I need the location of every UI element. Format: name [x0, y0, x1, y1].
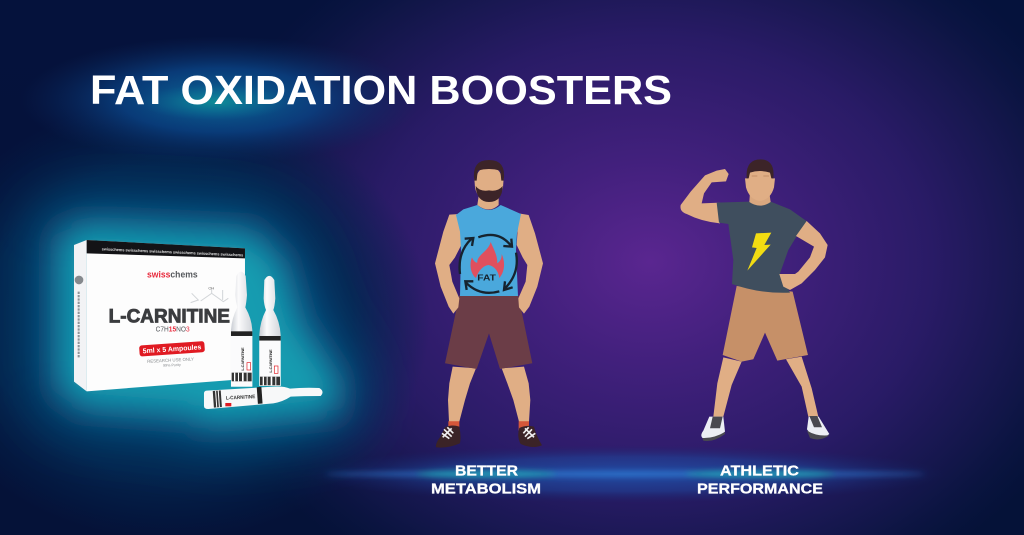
- eyebrows: [752, 175, 769, 177]
- product name: L-CARNITINE: [109, 306, 230, 327]
- ampoule lying down: L-CARNITINE: [226, 394, 256, 402]
- figure: man with fat-burning icon: [435, 160, 543, 448]
- side seal: [75, 276, 83, 358]
- shorts: [445, 295, 532, 369]
- box black top band: [87, 240, 245, 258]
- label: athletic performance: ATHLETIC: [720, 462, 799, 480]
- research note: RESEARCH USE ONLY: [147, 356, 194, 364]
- ampoule lying down: [204, 387, 323, 409]
- left shoe: [701, 417, 725, 439]
- label: better metabolism: METABOLISM: [431, 480, 541, 498]
- neck: [477, 192, 499, 209]
- shoes: [436, 425, 542, 448]
- hair: [747, 159, 774, 178]
- head: [745, 167, 775, 201]
- label: athletic performance: PERFORMANCE: [697, 480, 823, 498]
- label: better metabolism: BETTER: [455, 462, 518, 480]
- legs: [448, 367, 530, 422]
- molecule labels: OH: [208, 285, 214, 290]
- product: L-carnitine box and ampoules: [74, 240, 323, 409]
- formula: C7H15NO3: [156, 327, 190, 334]
- neck: [749, 193, 771, 206]
- legs: [713, 357, 818, 417]
- ampoule back: L-CARNITINE: [268, 349, 273, 373]
- hair: [474, 160, 504, 181]
- grey t-shirt: [717, 202, 807, 293]
- flame icon: [471, 242, 504, 278]
- flexing arm: [680, 169, 729, 223]
- beard: [476, 186, 503, 202]
- brand logo: swisschems: [147, 270, 198, 280]
- arms: [435, 213, 543, 314]
- head: [474, 167, 504, 201]
- figure: man flexing with lightning shirt: [680, 159, 829, 441]
- label: athletic performance: [697, 462, 823, 498]
- hip arm: [779, 221, 828, 290]
- research note: 99% Purity: [163, 363, 181, 368]
- label: better metabolism: [431, 462, 541, 498]
- FAT label: FAT: [477, 272, 496, 282]
- ampoule back: [259, 276, 281, 386]
- shoe laces: [442, 427, 535, 439]
- ampoule front: [231, 272, 252, 387]
- box side panel: [74, 240, 87, 391]
- research note: [147, 356, 194, 368]
- red dose badge: [139, 341, 205, 357]
- blue tank top: [456, 205, 521, 296]
- ampoule front: L-CARNITINE: [240, 347, 245, 371]
- right shoe: [807, 417, 829, 437]
- shorts: [723, 286, 808, 362]
- lightning bolt: [747, 233, 771, 271]
- box front panel: [87, 240, 245, 391]
- box black top band: swisschems swisschems swisschems swisschems swisschems swisschems: [102, 246, 244, 258]
- red dose badge: 5ml x 5 Ampoules: [143, 344, 202, 355]
- socks: [448, 421, 529, 431]
- title: FAT OXIDATION BOOSTERS: [90, 67, 672, 113]
- cycle arrows: [460, 235, 517, 293]
- molecule: [191, 289, 228, 303]
